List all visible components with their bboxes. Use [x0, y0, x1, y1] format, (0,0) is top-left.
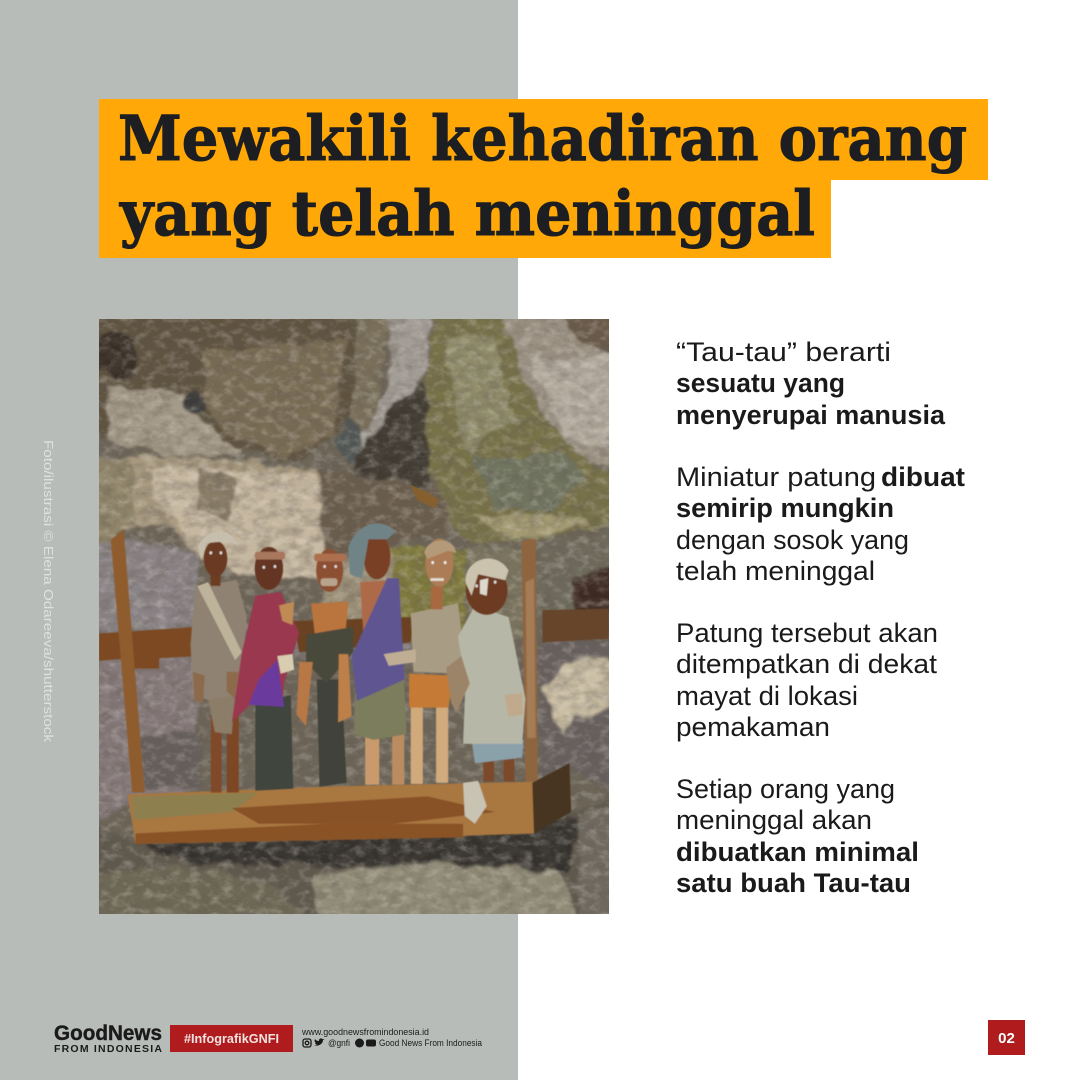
website and social handles: Good News From Indonesia: [379, 1038, 482, 1048]
paragraph 3: pemakaman: [676, 712, 830, 742]
icon: instagram: [303, 1039, 311, 1047]
statue 6: white coat: [446, 559, 526, 782]
paragraph 4: dibuatkan minimal: [676, 837, 919, 867]
photo base tone: [99, 319, 609, 914]
left grey background panel: [0, 0, 518, 1080]
title highlight line 1: [99, 99, 988, 180]
website and social handles: [301, 1027, 482, 1048]
paragraph 1: [676, 337, 946, 430]
statue 2: magenta and purple cloth: [232, 547, 299, 791]
title text line 1: Mewakili kehadiran orang: [118, 102, 967, 175]
hashtag badge: #InfografikGNFI: [184, 1031, 279, 1046]
wooden frame and shelf: [99, 485, 609, 844]
photo: Tau-tau statues in a cave: [89, 309, 619, 917]
logo: GoodNews From Indonesia: [54, 1022, 162, 1055]
title highlight line 2: [99, 180, 831, 258]
footer: [54, 1022, 482, 1055]
title text line 2: yang telah meninggal: [119, 177, 815, 250]
paragraph 4: [676, 774, 919, 898]
statues: [191, 523, 526, 793]
title: [99, 99, 988, 258]
statue 3: bare torso and dark trousers: [297, 549, 353, 787]
statue 1: sash and grey shirt: [191, 531, 247, 793]
website and social handles: www.goodnewsfromindonesia.id: [301, 1027, 429, 1037]
website and social handles: @gnfi: [328, 1038, 350, 1048]
paragraph 1: sesuatu yang: [676, 368, 845, 398]
page number badge: 02: [998, 1030, 1015, 1047]
paragraph 2: dengan sosok yang: [676, 525, 909, 555]
paragraph 4: meninggal akan: [676, 805, 872, 835]
paragraph 4: satu buah Tau-tau: [676, 868, 911, 898]
icon: twitter: [314, 1038, 324, 1046]
paragraph 2: semirip mungkin: [676, 493, 894, 523]
page number badge: [988, 1020, 1025, 1055]
paragraph 2: telah meninggal: [676, 556, 875, 586]
statue 5: shirt and orange shorts: [384, 538, 463, 784]
paragraph 3: [676, 618, 938, 742]
hashtag badge: [170, 1025, 293, 1052]
paragraph 2: dibuat: [881, 462, 965, 492]
rock texture shadow: [99, 319, 609, 914]
photo credit: Foto/ilustrasi © Elena Odareeva/shutterstock: [41, 440, 56, 743]
logo: GoodNews From Indonesia: FROM INDONESIA: [54, 1043, 162, 1055]
upper cave ceiling and boulders: [89, 309, 619, 639]
icon: youtube: [366, 1040, 376, 1046]
body text: [676, 337, 965, 898]
statue 4: headscarf and purple sash: [348, 523, 407, 785]
paragraph 1: menyerupai manusia: [676, 400, 946, 430]
paragraph 3: ditempatkan di dekat: [676, 649, 938, 679]
paragraph 2: Miniatur patung: [676, 462, 876, 492]
paragraph 4: Setiap orang yang: [676, 774, 895, 804]
paragraph 2: [676, 462, 965, 586]
paragraph 3: mayat di lokasi: [676, 681, 858, 711]
lower cave wall: [90, 539, 617, 917]
paragraph 1: “Tau-tau” berarti: [676, 337, 891, 367]
rock texture highlight: [99, 319, 609, 914]
icon: facebook: [355, 1038, 364, 1048]
paragraph 3: Patung tersebut akan: [676, 618, 938, 648]
logo: GoodNews From Indonesia: GoodNews: [54, 1022, 162, 1045]
